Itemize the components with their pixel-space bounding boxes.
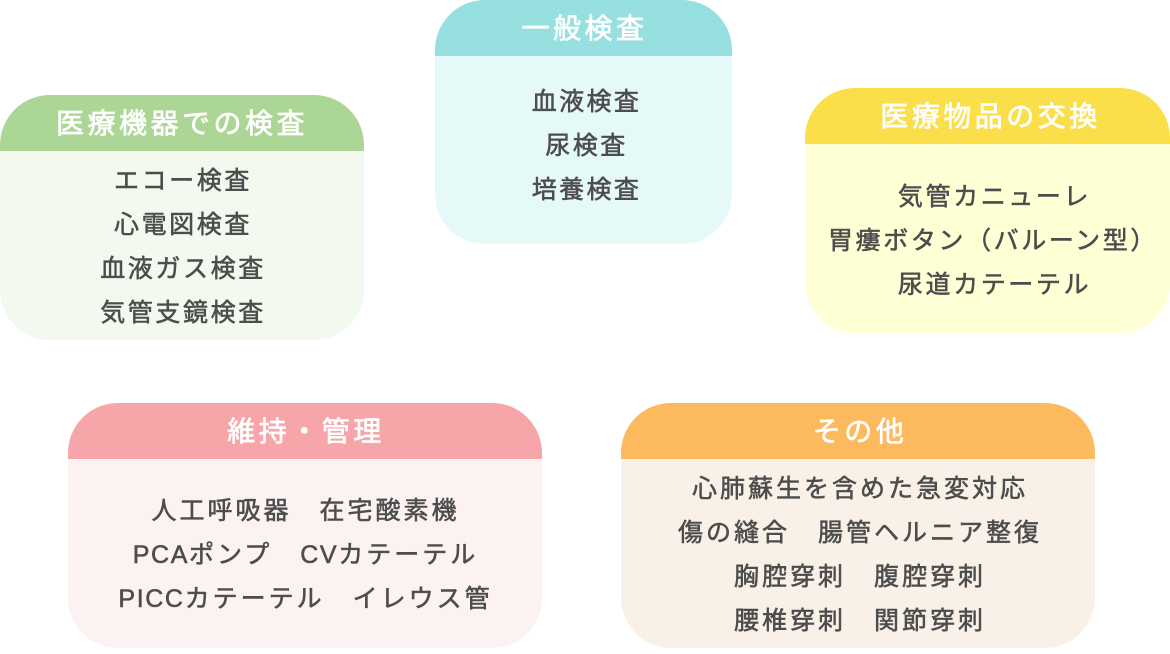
list: maintenance and management: PCAポンプ CVカテーテル <box>133 541 478 569</box>
list: other procedures: 心肺蘇生を含めた急変対応 <box>692 475 1028 503</box>
list: equipment tests: エコー検査 <box>114 167 252 195</box>
list: general tests <box>532 88 641 204</box>
heading: maintenance and management: 維持・管理 <box>227 416 385 447</box>
list: medical supply replacement <box>828 183 1158 299</box>
heading: general tests: 一般検査 <box>521 13 648 44</box>
list: maintenance and management: 人工呼吸器 在宅酸素機 <box>151 497 460 525</box>
list: general tests: 培養検査 <box>532 176 641 204</box>
heading: medical supply replacement: 医療物品の交換 <box>880 101 1101 132</box>
heading: other <box>621 403 1095 459</box>
list: other procedures: 傷の縫合 腸管ヘルニア整復 <box>678 519 1042 547</box>
list: general tests: 尿検査 <box>545 132 628 160</box>
heading: maintenance and management <box>68 403 542 459</box>
list: maintenance and management <box>118 497 493 613</box>
heading: equipment tests <box>0 95 364 151</box>
list: equipment tests: 心電図検査 <box>114 211 252 239</box>
list: general tests: 血液検査 <box>532 88 641 116</box>
panel: general tests <box>435 0 732 244</box>
list: other procedures: 腰椎穿刺 関節穿刺 <box>734 607 986 635</box>
list: maintenance and management: PICCカテーテル イレウス管 <box>118 585 493 613</box>
heading: general tests <box>435 0 732 56</box>
heading: other: その他 <box>813 416 907 447</box>
list: medical supply replacement: 尿道カテーテル <box>898 271 1091 299</box>
list: equipment tests: 血液ガス検査 <box>100 255 266 283</box>
heading: equipment tests: 医療機器での検査 <box>56 108 308 139</box>
panel: medical supply replacement <box>805 88 1170 333</box>
panel: other <box>621 403 1095 648</box>
list: equipment tests: 気管支鏡検査 <box>100 299 266 327</box>
list: equipment tests <box>100 167 266 327</box>
list: medical supply replacement: 気管カニューレ <box>898 183 1091 211</box>
panel: equipment tests <box>0 95 364 340</box>
panel: maintenance and management <box>68 403 542 648</box>
heading: medical supply replacement <box>805 88 1170 144</box>
list: medical supply replacement: 胃瘻ボタン（バルーン型） <box>828 227 1158 255</box>
list: other procedures <box>678 475 1042 635</box>
list: other procedures: 胸腔穿刺 腹腔穿刺 <box>734 563 986 591</box>
